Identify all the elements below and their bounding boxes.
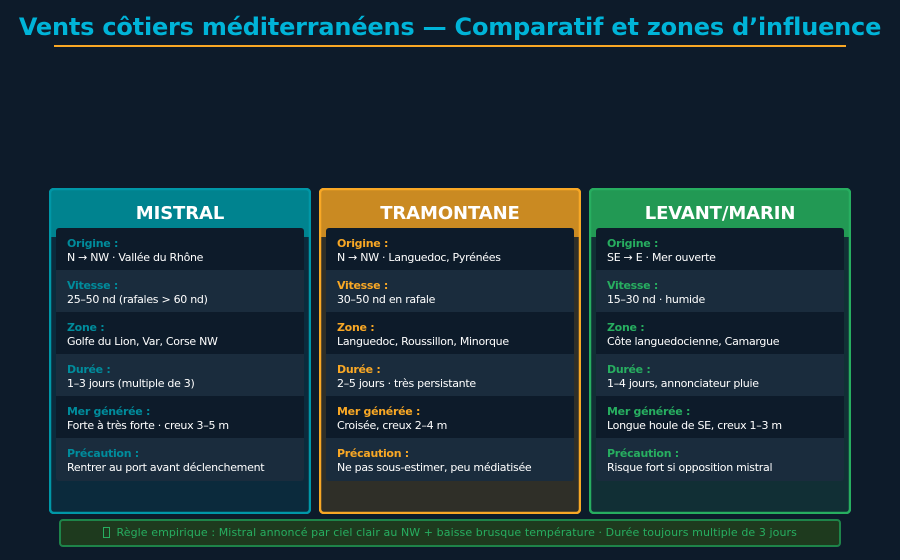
- panel: Tramontane: [319, 188, 581, 514]
- row: mer générée: Mer générée :: [607, 405, 690, 418]
- row: durée: Durée :: [607, 363, 651, 376]
- row: zone: [56, 312, 304, 354]
- Mistral data rows: [56, 228, 304, 481]
- row: mer générée: Croisée, creux 2–4 m: [337, 419, 447, 432]
- row: zone: Zone :: [607, 321, 644, 334]
- row: précaution: Rentrer au port avant déclenchement: [67, 461, 264, 474]
- row: précaution: Risque fort si opposition mistral: [607, 461, 772, 474]
- row: mer générée: Mer générée :: [67, 405, 150, 418]
- heading: Tramontane: TRAMONTANE: [380, 203, 520, 224]
- callout: empirical rule: Règle empirique : Mistral annoncé par ciel clair au NW + baisse brusque température · Durée toujours multiple de 3 jours: [116, 526, 797, 539]
- panel: Levant/Marin: [589, 188, 851, 514]
- row: durée: [326, 354, 574, 396]
- row: mer générée: Longue houle de SE, creux 1–3 m: [607, 419, 782, 432]
- callout: empirical rule: [59, 519, 841, 547]
- row: durée: Durée :: [337, 363, 381, 376]
- row: origine: Origine :: [337, 237, 388, 250]
- row: mer générée: [56, 396, 304, 438]
- heading: Levant/Marin: LEVANT/MARIN: [645, 203, 795, 224]
- row: durée: 1–3 jours (multiple de 3): [67, 377, 194, 390]
- Levant/Marin data rows: [596, 228, 844, 481]
- row: origine: N → NW · Vallée du Rhône: [67, 251, 203, 264]
- row: mer générée: [326, 396, 574, 438]
- row: zone: Zone :: [67, 321, 104, 334]
- row: origine: SE → E · Mer ouverte: [607, 251, 716, 264]
- row: durée: [56, 354, 304, 396]
- row: vitesse: [326, 270, 574, 312]
- row: zone: Côte languedocienne, Camargue: [607, 335, 779, 348]
- heading: Mistral: MISTRAL: [136, 203, 224, 224]
- row: origine: [56, 228, 304, 270]
- row: durée: [596, 354, 844, 396]
- row: zone: [326, 312, 574, 354]
- panel: Mistral: [49, 188, 311, 514]
- row: zone: [596, 312, 844, 354]
- row: précaution: [326, 438, 574, 481]
- row: précaution: Ne pas sous-estimer, peu médiatisée: [337, 461, 531, 474]
- row: précaution: Précaution :: [607, 447, 679, 460]
- row: vitesse: Vitesse :: [337, 279, 388, 292]
- row: précaution: Précaution :: [67, 447, 139, 460]
- row: vitesse: Vitesse :: [67, 279, 118, 292]
- row: origine: [326, 228, 574, 270]
- row: origine: Origine :: [67, 237, 118, 250]
- row: zone: Languedoc, Roussillon, Minorque: [337, 335, 509, 348]
- row: origine: N → NW · Languedoc, Pyrénées: [337, 251, 501, 264]
- row: durée: Durée :: [67, 363, 111, 376]
- row: précaution: [596, 438, 844, 481]
- row: vitesse: [56, 270, 304, 312]
- row: mer générée: Forte à très forte · creux 3–5 m: [67, 419, 229, 432]
- row: mer générée: Mer générée :: [337, 405, 420, 418]
- title underline: [54, 45, 846, 47]
- row: durée: 2–5 jours · très persistante: [337, 377, 476, 390]
- row: vitesse: 30–50 nd en rafale: [337, 293, 435, 306]
- row: mer générée: [596, 396, 844, 438]
- row: vitesse: [596, 270, 844, 312]
- row: précaution: [56, 438, 304, 481]
- row: vitesse: 15–30 nd · humide: [607, 293, 705, 306]
- row: vitesse: Vitesse :: [607, 279, 658, 292]
- row: zone: Golfe du Lion, Var, Corse NW: [67, 335, 218, 348]
- row: origine: Origine :: [607, 237, 658, 250]
- row: durée: 1–4 jours, annonciateur pluie: [607, 377, 759, 390]
- Tramontane data rows: [326, 228, 574, 481]
- row: zone: Zone :: [337, 321, 374, 334]
- row: vitesse: 25–50 nd (rafales > 60 nd): [67, 293, 208, 306]
- row: origine: [596, 228, 844, 270]
- row: précaution: Précaution :: [337, 447, 409, 460]
- title: Vents côtiers méditerranéens — Comparatif et zones d’influence: [19, 13, 881, 41]
